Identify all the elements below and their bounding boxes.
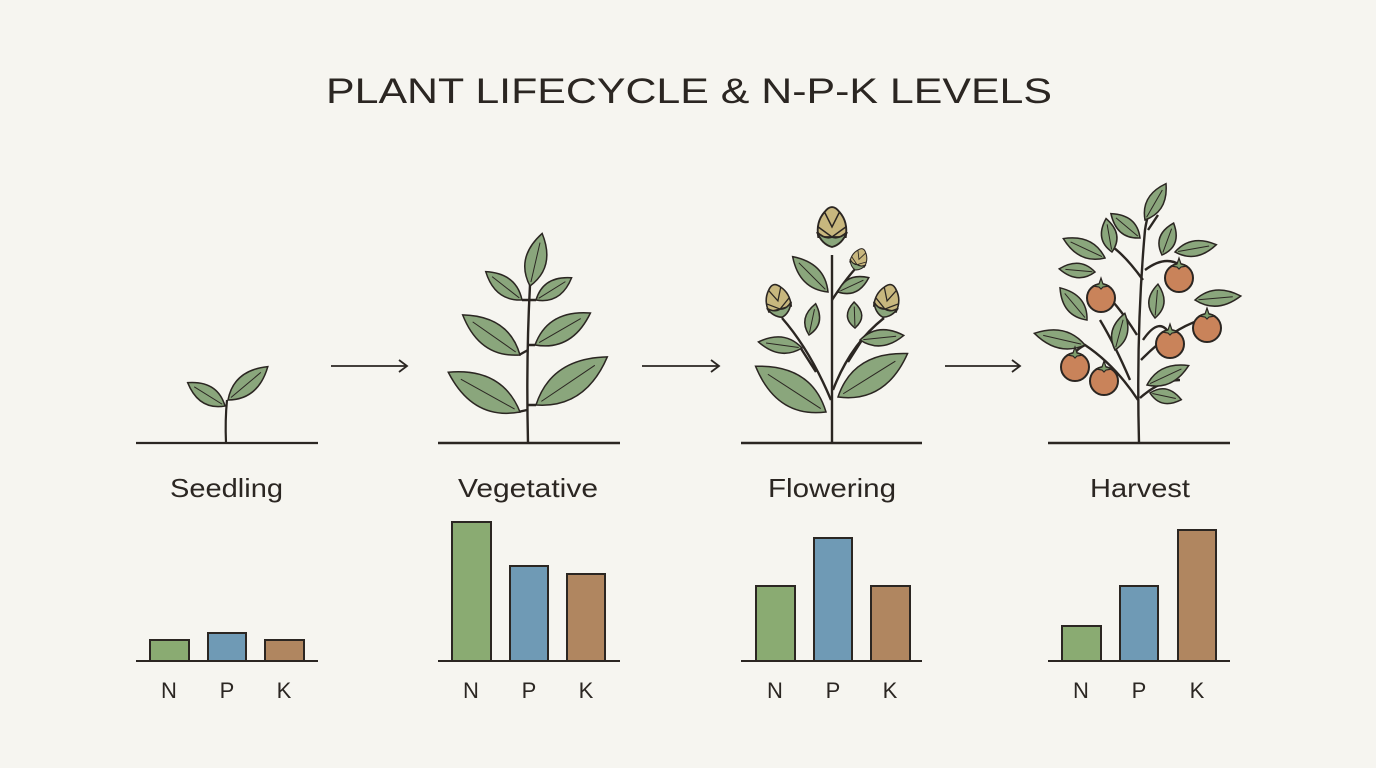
stage: flowering (741, 207, 922, 703)
bar chart: harvest NPK: P (1132, 678, 1146, 703)
plant: harvest (1032, 180, 1242, 443)
arrow 1 (331, 360, 407, 372)
label: harvest: Harvest (1090, 473, 1191, 503)
bar chart: flowering NPK (741, 538, 922, 703)
stage: harvest (1032, 180, 1242, 703)
bar chart: seedling NPK (136, 633, 318, 703)
bar chart: flowering NPK: K (883, 678, 898, 703)
stage: seedling (136, 359, 318, 703)
plant: vegetative (438, 231, 620, 443)
plant: flowering (741, 207, 922, 443)
label: vegetative: Vegetative (458, 473, 598, 503)
stage: vegetative (438, 231, 620, 703)
plant: seedling (136, 359, 318, 443)
bar chart: harvest NPK: N (1073, 678, 1089, 703)
bar chart: vegetative NPK: P (522, 678, 536, 703)
bar chart: flowering NPK: N (767, 678, 783, 703)
bar chart: harvest NPK (1048, 530, 1230, 703)
title: PLANT LIFECYCLE & N-P-K LEVELS (326, 72, 1052, 111)
arrow 2 (642, 360, 719, 372)
label: flowering: Flowering (768, 473, 896, 503)
label: seedling: Seedling (170, 473, 283, 503)
bar chart: vegetative NPK: K (579, 678, 594, 703)
bar chart: vegetative NPK (438, 522, 620, 703)
bar chart: seedling NPK: N (161, 678, 177, 703)
bar chart: vegetative NPK: N (463, 678, 479, 703)
bar chart: seedling NPK: P (220, 678, 234, 703)
bar chart: flowering NPK: P (826, 678, 840, 703)
bar chart: seedling NPK: K (277, 678, 292, 703)
bar chart: harvest NPK: K (1190, 678, 1205, 703)
arrow 3 (945, 360, 1020, 372)
